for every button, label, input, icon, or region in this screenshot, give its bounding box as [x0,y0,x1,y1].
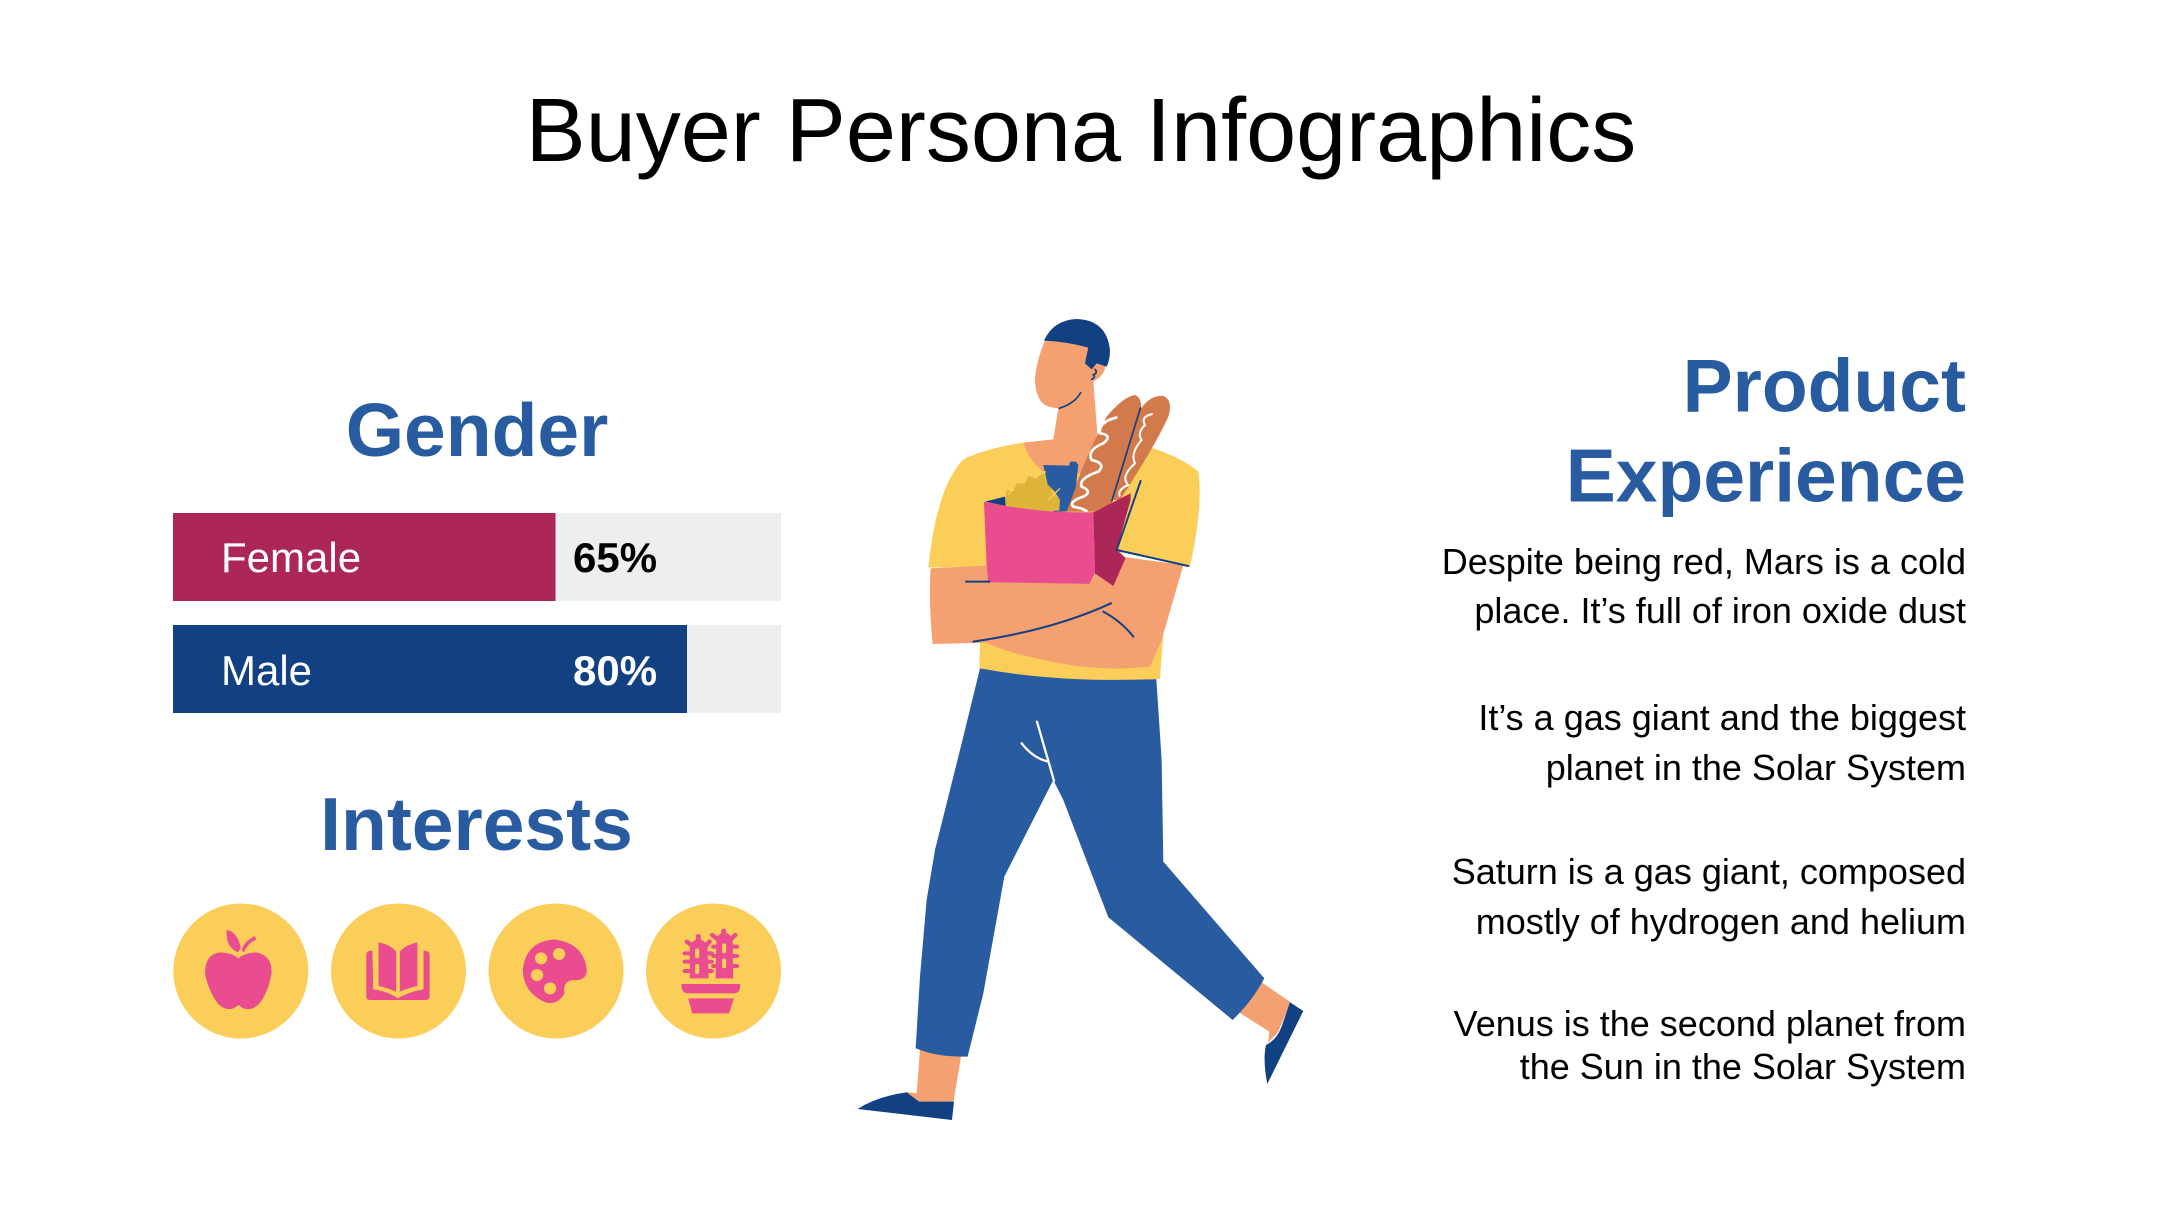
text block: mars: Despite being red, Mars is a cold [1442,541,1966,582]
bar: male: Male [221,647,312,694]
title: Buyer Persona Infographics [526,81,1636,181]
text block: venus: the Sun in the Solar System [1520,1046,1966,1087]
face lines [1059,369,1096,408]
heading: interests: Interests [320,782,633,866]
text block: mars [1442,541,1966,631]
icon: palette [523,939,587,1003]
blue carton [1043,462,1078,512]
bar: male [173,625,781,713]
bar: male: 80% [573,647,657,694]
text block: jupiter [1478,697,1966,788]
text block: saturn: mostly of hydrogen and helium [1476,901,1966,942]
heading: product experience: Product [1683,344,1966,428]
panel: product experience [1442,344,1966,1087]
hair [1044,319,1110,369]
bag front [984,502,1095,584]
bar: female: 65% [573,534,657,581]
torso and groceries [928,319,1200,680]
front shoe [858,1092,954,1120]
text block: saturn [1452,851,1966,942]
arms [930,557,1183,669]
icon: cactus [682,931,740,1013]
heading: gender: Gender [346,388,608,472]
panel: product experience: Experience [1566,434,1966,518]
text block: jupiter: planet in the Solar System [1546,747,1966,788]
panel: interests [173,782,781,1038]
trailing foot skin [1230,977,1291,1043]
rear shoe [1265,1002,1303,1084]
bread roll [1005,472,1060,511]
bag inner [985,497,1006,506]
text block: venus [1454,1003,1966,1087]
shirt [928,440,1200,680]
text block: saturn: Saturn is a gas giant, composed [1452,851,1966,892]
text block: mars: place. It’s full of iron oxide dust [1474,590,1966,631]
bar: female: Female [221,534,361,581]
head and neck [1023,337,1106,473]
trouser pocket lines [1022,722,1054,781]
text block: jupiter: It’s a gas giant and the biggest [1478,697,1966,738]
rear baguette [1113,396,1170,500]
rear baguette icing [1119,414,1153,497]
bag side [1093,493,1131,612]
icon: book [366,942,430,1000]
back foot skin [907,1050,961,1103]
arm outlines [966,481,1188,642]
panel: gender [173,388,781,713]
bread roll marks [1008,472,1060,500]
baguette divider line [1112,407,1141,502]
front baguette [1067,395,1141,512]
illustration: man with grocery bag [858,319,1303,1120]
text block: venus: Venus is the second planet from [1454,1003,1966,1044]
bar: female [173,513,781,601]
front baguette icing [1072,417,1117,512]
trousers [916,668,1264,1057]
icon: apple [205,930,272,1009]
legs and shoes [858,668,1303,1120]
interest icons [173,904,781,1038]
